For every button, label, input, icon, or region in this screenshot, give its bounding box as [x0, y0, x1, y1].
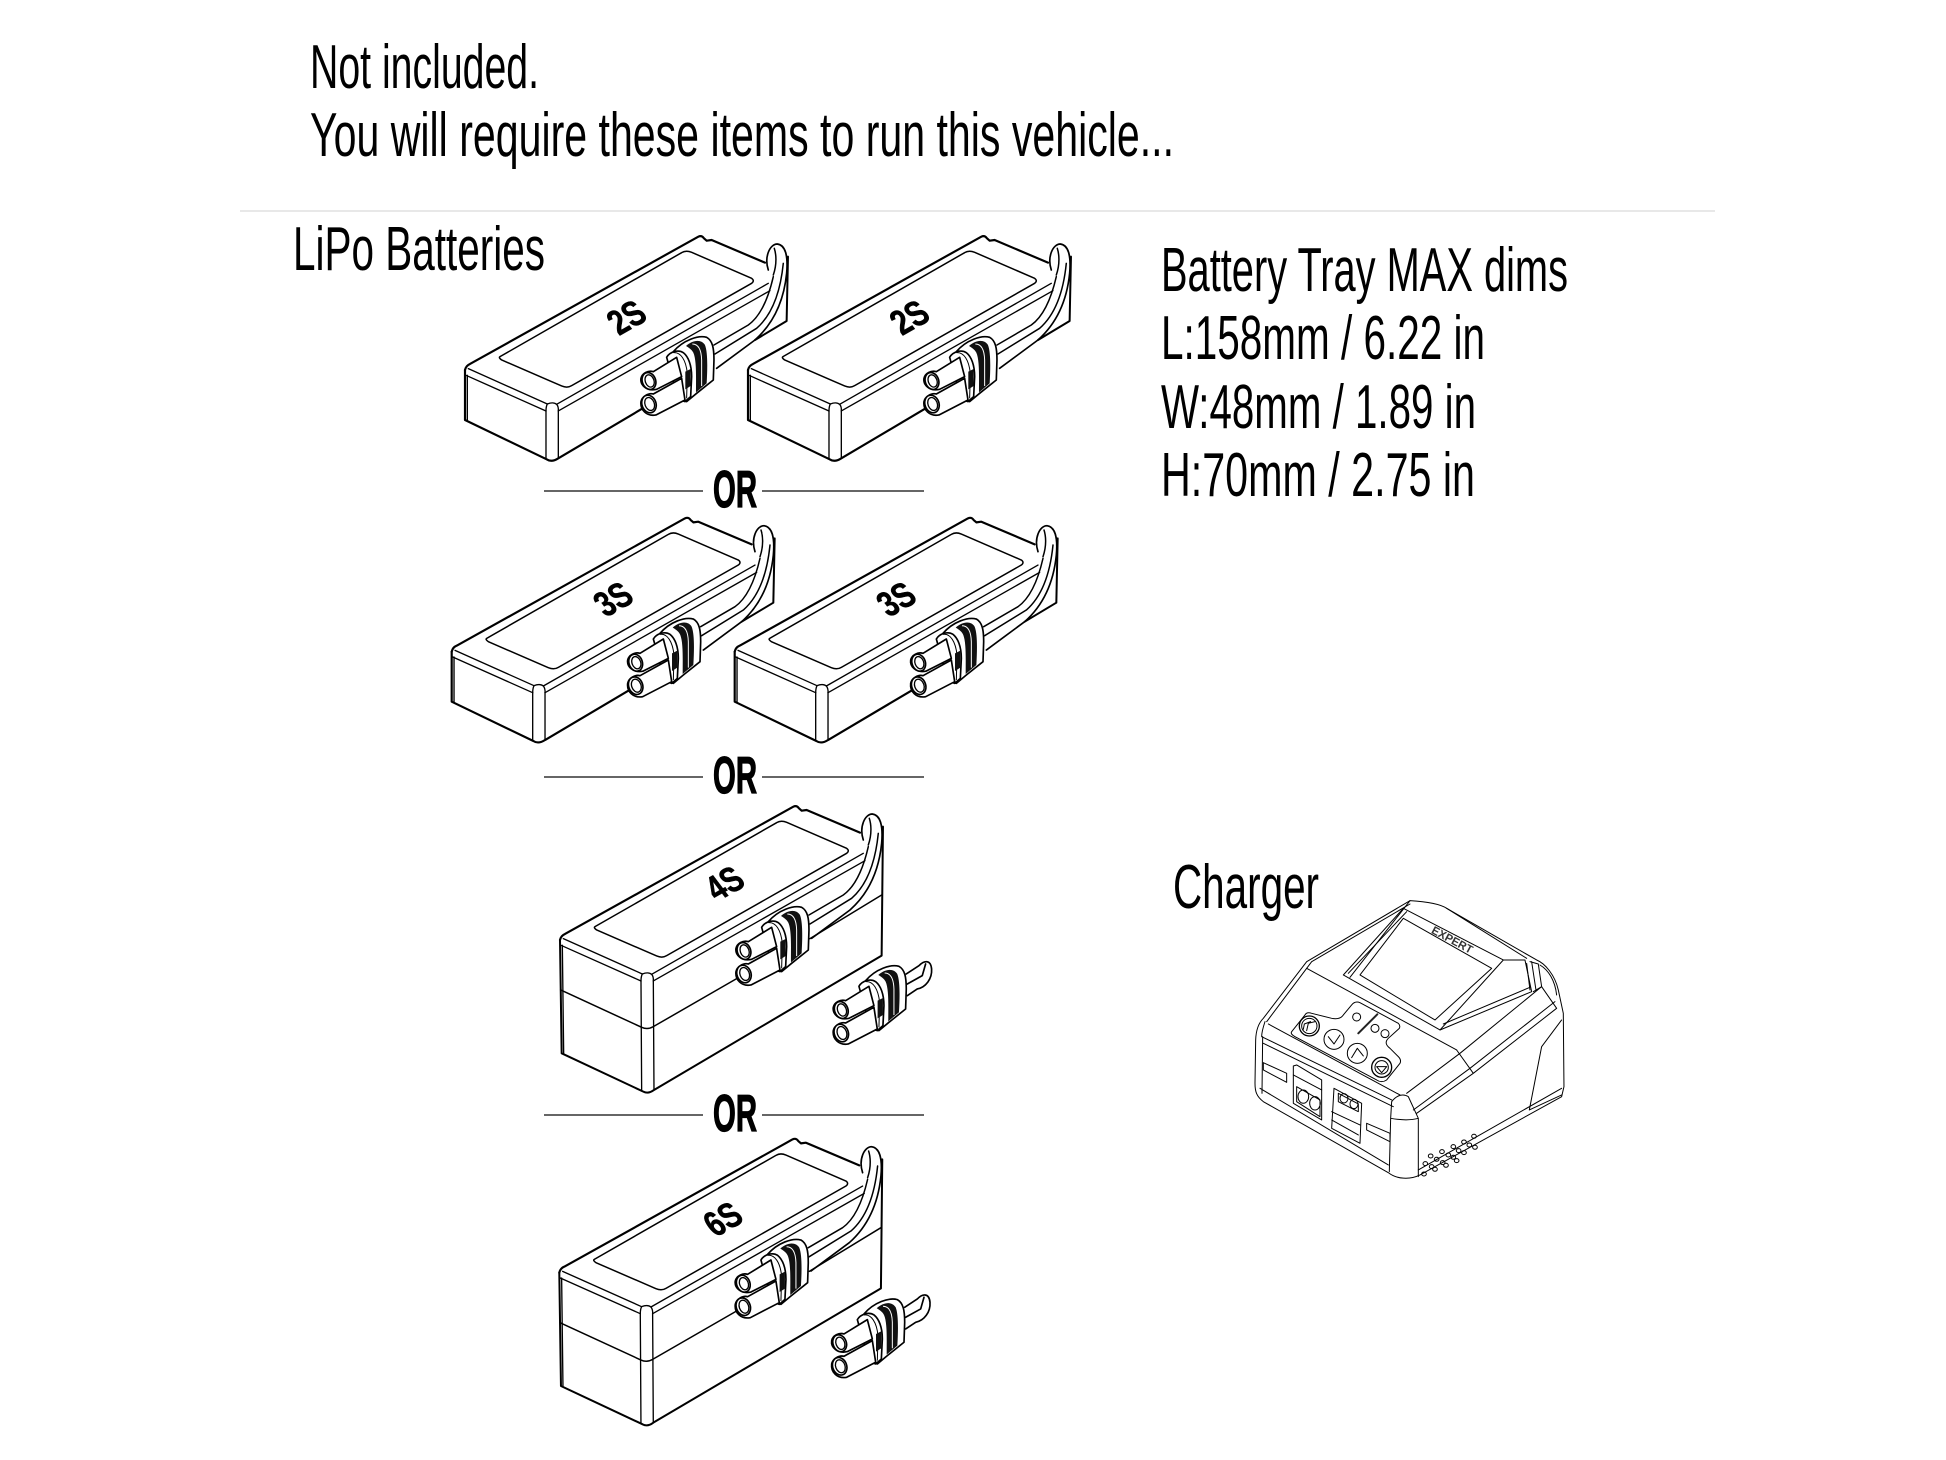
battery: 4S [560, 806, 883, 1093]
divider: OR 3: OR [713, 1085, 757, 1143]
battery: 2S right: 2S [882, 292, 937, 342]
connector: 4S spare plug [832, 962, 932, 1044]
text block: battery tray dimensions: W:48mm / 1.89 in [1161, 373, 1476, 442]
battery: 2S right [748, 236, 1071, 461]
text block: battery tray dimensions: H:70mm / 2.75 in [1161, 441, 1475, 510]
battery: 4S: 4S [697, 858, 752, 908]
battery: 2S left [465, 236, 788, 461]
divider: OR 2: OR [713, 747, 757, 805]
title: not included: Not included. [310, 33, 539, 102]
battery: 3S right: 3S [868, 574, 924, 624]
battery: 2S left: 2S [599, 292, 654, 342]
heading: LiPo Batteries: LiPo Batteries [293, 215, 545, 284]
divider: OR 1: OR [713, 461, 757, 519]
title: not included: You will require these items to run this vehicle... [310, 101, 1174, 170]
charger illustration: EXPERT [1429, 925, 1475, 956]
text block: battery tray dimensions: L:158mm / 6.22 in [1161, 304, 1485, 373]
text block: battery tray dimensions: Battery Tray MAX dims [1161, 236, 1568, 305]
title: not included [310, 33, 1174, 170]
text block: battery tray dimensions [1161, 236, 1568, 510]
charger illustration [1255, 901, 1564, 1178]
battery: 3S right [735, 518, 1058, 742]
battery: 3S left [452, 518, 775, 742]
battery: 3S left: 3S [585, 574, 641, 624]
battery: 6S: 6S [695, 1194, 750, 1244]
connector: 6S spare plug [830, 1295, 930, 1378]
heading: charger: Charger [1173, 853, 1319, 922]
battery: 6S [559, 1139, 882, 1425]
